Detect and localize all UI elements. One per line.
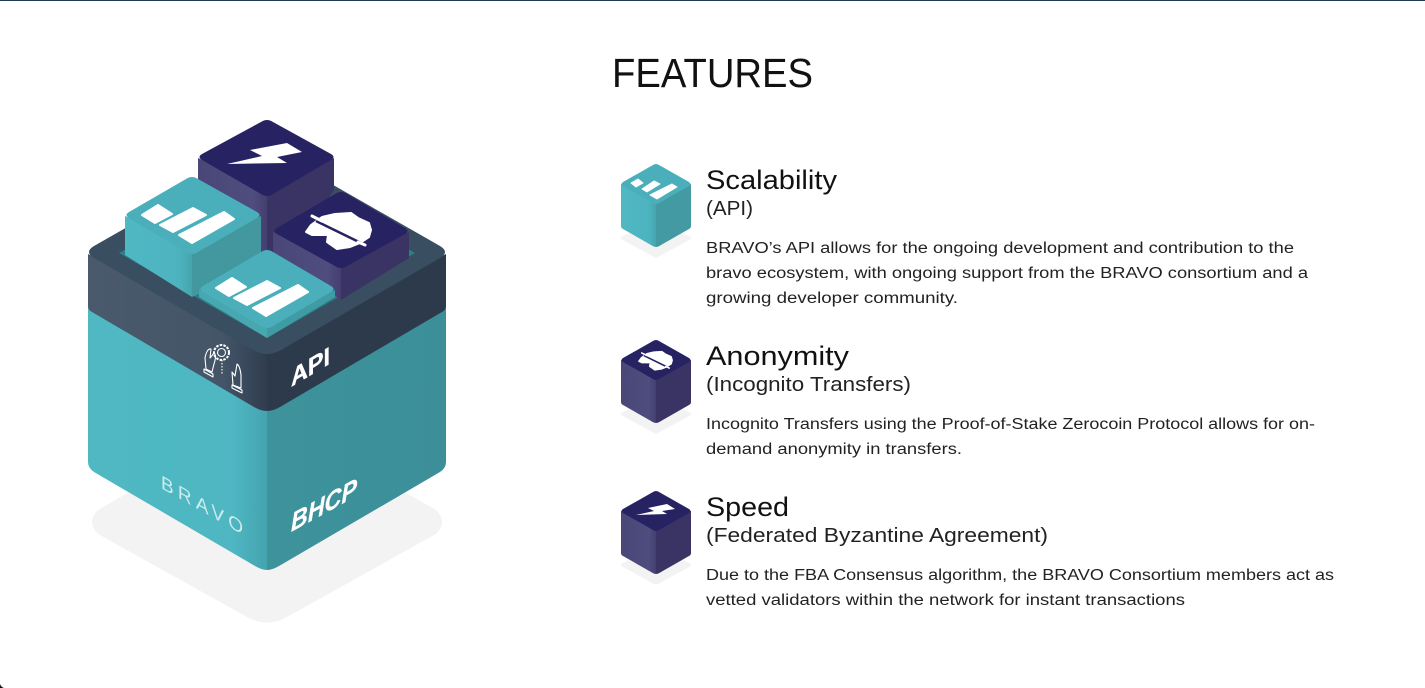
lightning block top bbox=[200, 120, 334, 196]
cloud block top bbox=[274, 192, 408, 268]
box body: right face bbox=[267, 300, 446, 570]
box floor shadow bbox=[92, 417, 442, 622]
illustration: BRAVO isometric box bbox=[88, 120, 446, 622]
icon: teal cube with bars bbox=[621, 164, 691, 258]
feature: scalability bbox=[621, 164, 1308, 307]
cube shadow bbox=[621, 547, 691, 584]
description: Due to the FBA Consensus algorithm, the BRAVO Consortium members act as bbox=[706, 567, 1334, 584]
subheading: (API) bbox=[706, 198, 753, 220]
description: BRAVO’s API allows for the ongoing development and contribution to the bbox=[706, 240, 1294, 257]
subheading: (Incognito Transfers) bbox=[706, 374, 911, 396]
heading: Anonymity bbox=[706, 341, 850, 371]
cube left face bbox=[621, 360, 656, 423]
lightning block left side bbox=[198, 158, 267, 285]
description: bravo ecosystem, with ongoing support from the BRAVO consortium and a bbox=[706, 265, 1308, 282]
cube right face bbox=[656, 360, 691, 423]
icon: bar chart bbox=[142, 205, 234, 243]
icon: bar chart bbox=[216, 278, 308, 316]
tray: left side bbox=[88, 254, 267, 411]
cube shadow bbox=[621, 220, 691, 258]
label: API: API bbox=[291, 341, 330, 393]
subheading: (Federated Byzantine Agreement) bbox=[706, 525, 1048, 547]
front teal block top bbox=[200, 250, 334, 328]
cube left face bbox=[621, 184, 656, 247]
description bbox=[706, 567, 1334, 609]
cube top bbox=[622, 491, 690, 531]
lightning block right side bbox=[267, 158, 334, 285]
cube bars glyph bbox=[631, 179, 677, 199]
block: cloud bbox=[273, 192, 409, 300]
cube top bbox=[622, 164, 690, 204]
cube right face bbox=[656, 184, 691, 247]
description: growing developer community. bbox=[706, 290, 958, 307]
cloud block left side bbox=[273, 232, 341, 300]
teal block top bbox=[126, 177, 260, 254]
block: teal bars, left bbox=[125, 177, 261, 297]
heading: Scalability bbox=[706, 165, 838, 195]
heading: Speed bbox=[706, 492, 789, 522]
label: BHCP: BHCP bbox=[291, 472, 357, 538]
icon: crossed-out cloud bbox=[306, 213, 371, 249]
cube top bbox=[622, 340, 690, 380]
icon: hands and gear bbox=[204, 345, 242, 393]
top border line bbox=[0, 0, 1425, 1]
teal block right side bbox=[192, 216, 261, 297]
description bbox=[706, 240, 1308, 307]
feature: speed bbox=[621, 491, 1334, 609]
block: lightning bbox=[198, 120, 334, 285]
block: teal bars, front bbox=[199, 250, 335, 338]
window corner bbox=[0, 684, 4, 688]
cube cloud glyph bbox=[639, 351, 672, 370]
tray: right side bbox=[267, 254, 446, 411]
icon: purple cube with lightning bbox=[621, 491, 691, 584]
cube shadow bbox=[621, 396, 691, 434]
icon: lightning bolt bbox=[227, 143, 302, 164]
cube right face bbox=[656, 511, 691, 574]
description: vetted validators within the network for instant transactions bbox=[706, 592, 1185, 609]
logo: BRAVO: BRAVO bbox=[161, 471, 243, 539]
icon: purple cube with cloud bbox=[621, 340, 691, 434]
feature: anonymity bbox=[621, 340, 1315, 458]
tray: top face bbox=[89, 150, 445, 354]
cube left face bbox=[621, 511, 656, 574]
front teal block left side bbox=[199, 290, 267, 338]
description bbox=[706, 416, 1315, 458]
front teal block right side bbox=[267, 290, 335, 338]
description: demand anonymity in transfers. bbox=[706, 441, 962, 458]
tray: inner well bbox=[119, 168, 415, 338]
title: FEATURES bbox=[612, 50, 813, 96]
cube lightning glyph bbox=[636, 504, 675, 515]
box body: left face bbox=[88, 300, 267, 570]
teal block left side bbox=[125, 216, 192, 297]
cloud block right side bbox=[341, 232, 409, 300]
description: Incognito Transfers using the Proof-of-Stake Zerocoin Protocol allows for on- bbox=[706, 416, 1315, 433]
